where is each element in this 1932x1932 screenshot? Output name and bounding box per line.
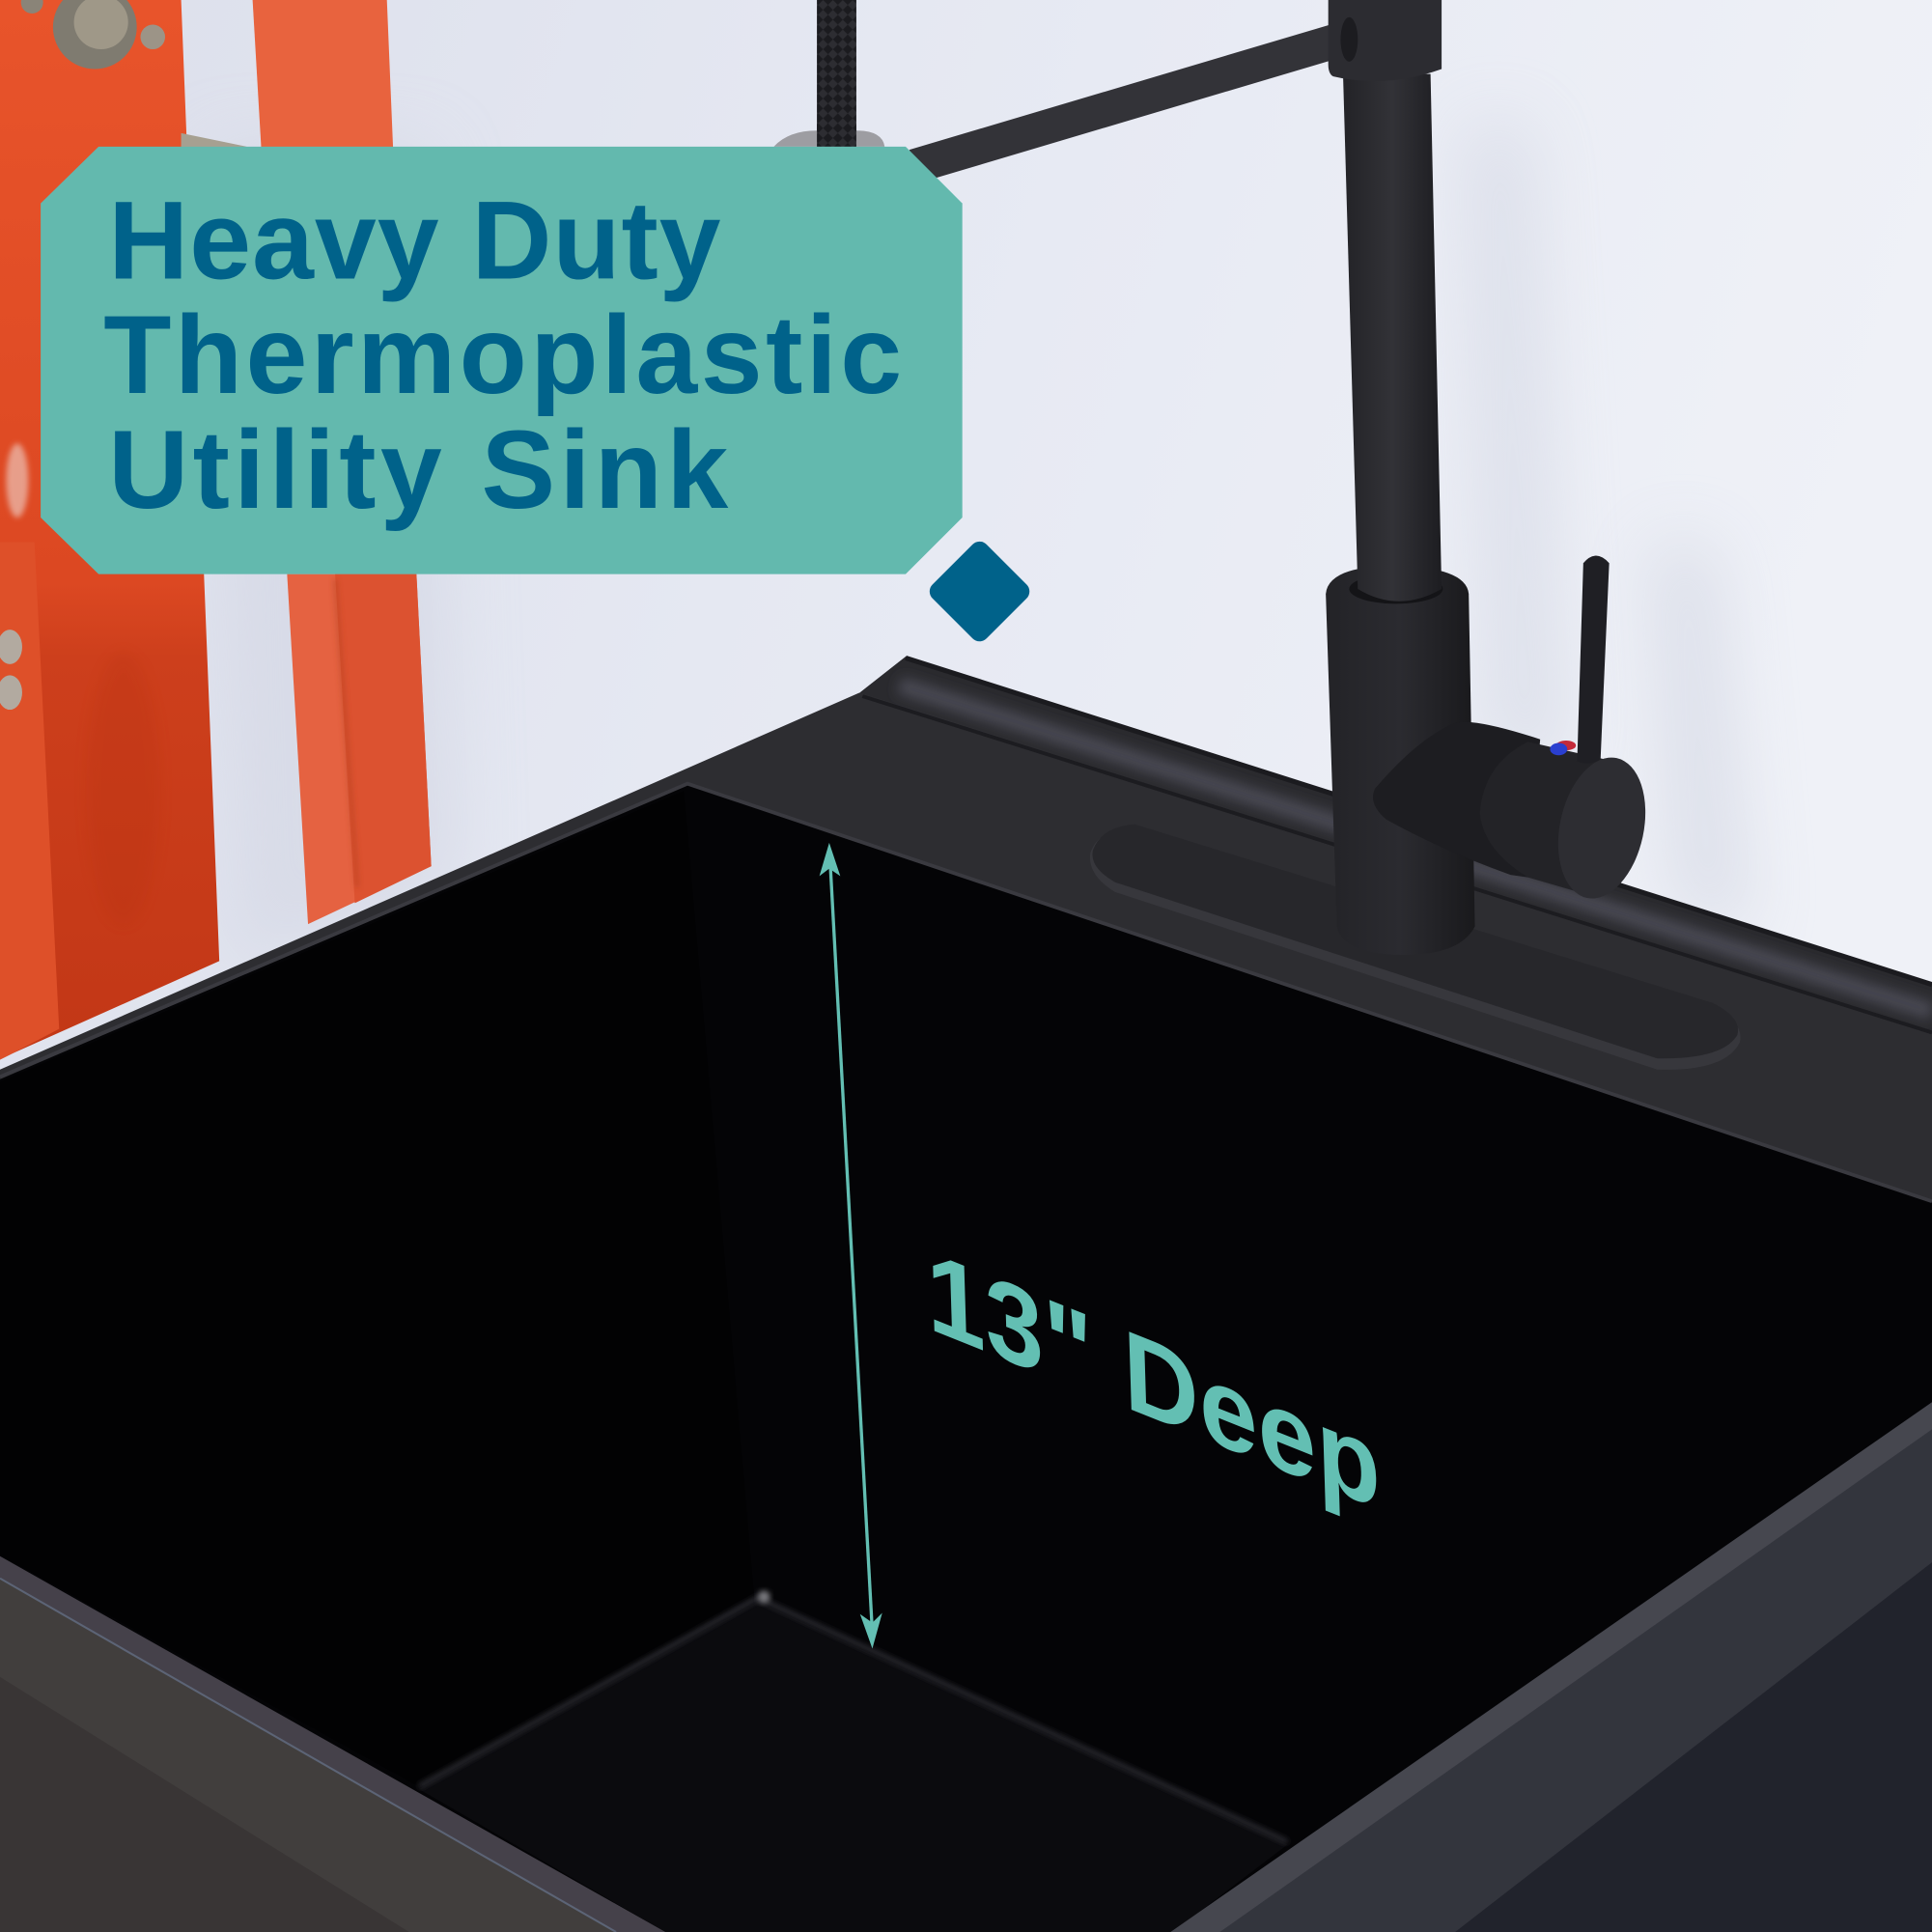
ladder <box>0 0 432 1059</box>
ladder rung <box>182 133 253 148</box>
sink front left rim <box>0 1556 665 1932</box>
basin left wall <box>0 791 754 1786</box>
sink deck rim <box>0 657 1932 1932</box>
ladder left rail <box>0 0 219 1059</box>
depth arrow <box>820 843 882 1648</box>
basin highlight edge <box>0 784 1932 1201</box>
lever <box>1577 556 1610 764</box>
spray hose <box>773 0 884 148</box>
temperature dot <box>1550 741 1576 755</box>
faucet deck plate <box>1090 825 1741 1070</box>
title line 3: Utility Sink <box>108 408 728 532</box>
sink front right rim <box>1170 1402 1932 1932</box>
basin interior <box>0 784 1932 1932</box>
depth label: 13" Deep <box>925 1225 1382 1534</box>
base collar ring <box>1349 574 1442 603</box>
handle end cap <box>1546 749 1658 907</box>
wall background <box>0 0 1932 1232</box>
sink basin <box>0 784 1932 1932</box>
faucet base cylinder <box>1326 566 1475 955</box>
handle cylinder <box>1480 742 1645 897</box>
diamond marker <box>926 538 1033 645</box>
title line 2: Thermoplastic <box>103 294 902 417</box>
ladder bolts <box>0 0 165 710</box>
handle body <box>1373 722 1540 878</box>
faucet <box>773 0 1658 955</box>
upper pipe <box>1343 74 1442 602</box>
ladder right rail <box>253 0 432 924</box>
title line 1: Heavy Duty <box>108 179 721 302</box>
title callout panel <box>41 147 963 574</box>
sink back ledge <box>860 657 1932 1032</box>
top collar <box>1329 0 1442 81</box>
basin floor <box>419 1602 1288 1932</box>
spout arm <box>914 41 1337 166</box>
